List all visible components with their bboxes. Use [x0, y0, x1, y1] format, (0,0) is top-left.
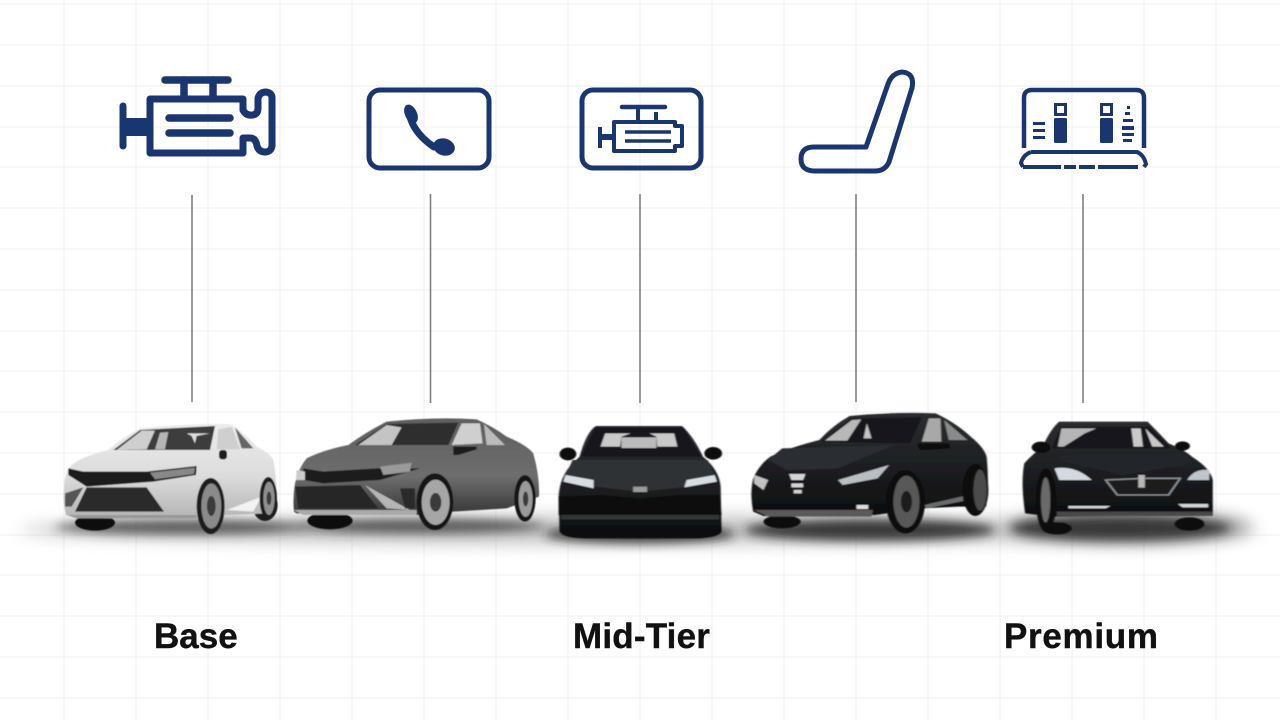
ground shadow [20, 510, 1260, 544]
car: premium black sedan [1023, 422, 1213, 534]
icon: engine [123, 80, 272, 153]
car: base white sedan [64, 424, 278, 534]
connector line: seat [855, 194, 857, 402]
tier label: Mid-Tier: Mid-Tier [573, 617, 710, 656]
car: gray sedan [293, 418, 539, 530]
car: mid-tier front view [559, 426, 722, 538]
connector line: phone [430, 194, 432, 403]
tier label: Premium: Premium [1004, 617, 1159, 656]
car: upper mid black sedan [751, 413, 988, 533]
tier label: Base: Base [154, 617, 238, 656]
connector line: base engine [191, 195, 193, 402]
connector line: premium dashboard [1082, 194, 1084, 403]
icon: engine in rounded box [582, 90, 701, 168]
icon: premium dashboard [1021, 90, 1146, 167]
icon: seat [801, 72, 913, 171]
connector line: mid-tier engine [639, 194, 641, 403]
icon: phone in rounded box [369, 90, 489, 168]
